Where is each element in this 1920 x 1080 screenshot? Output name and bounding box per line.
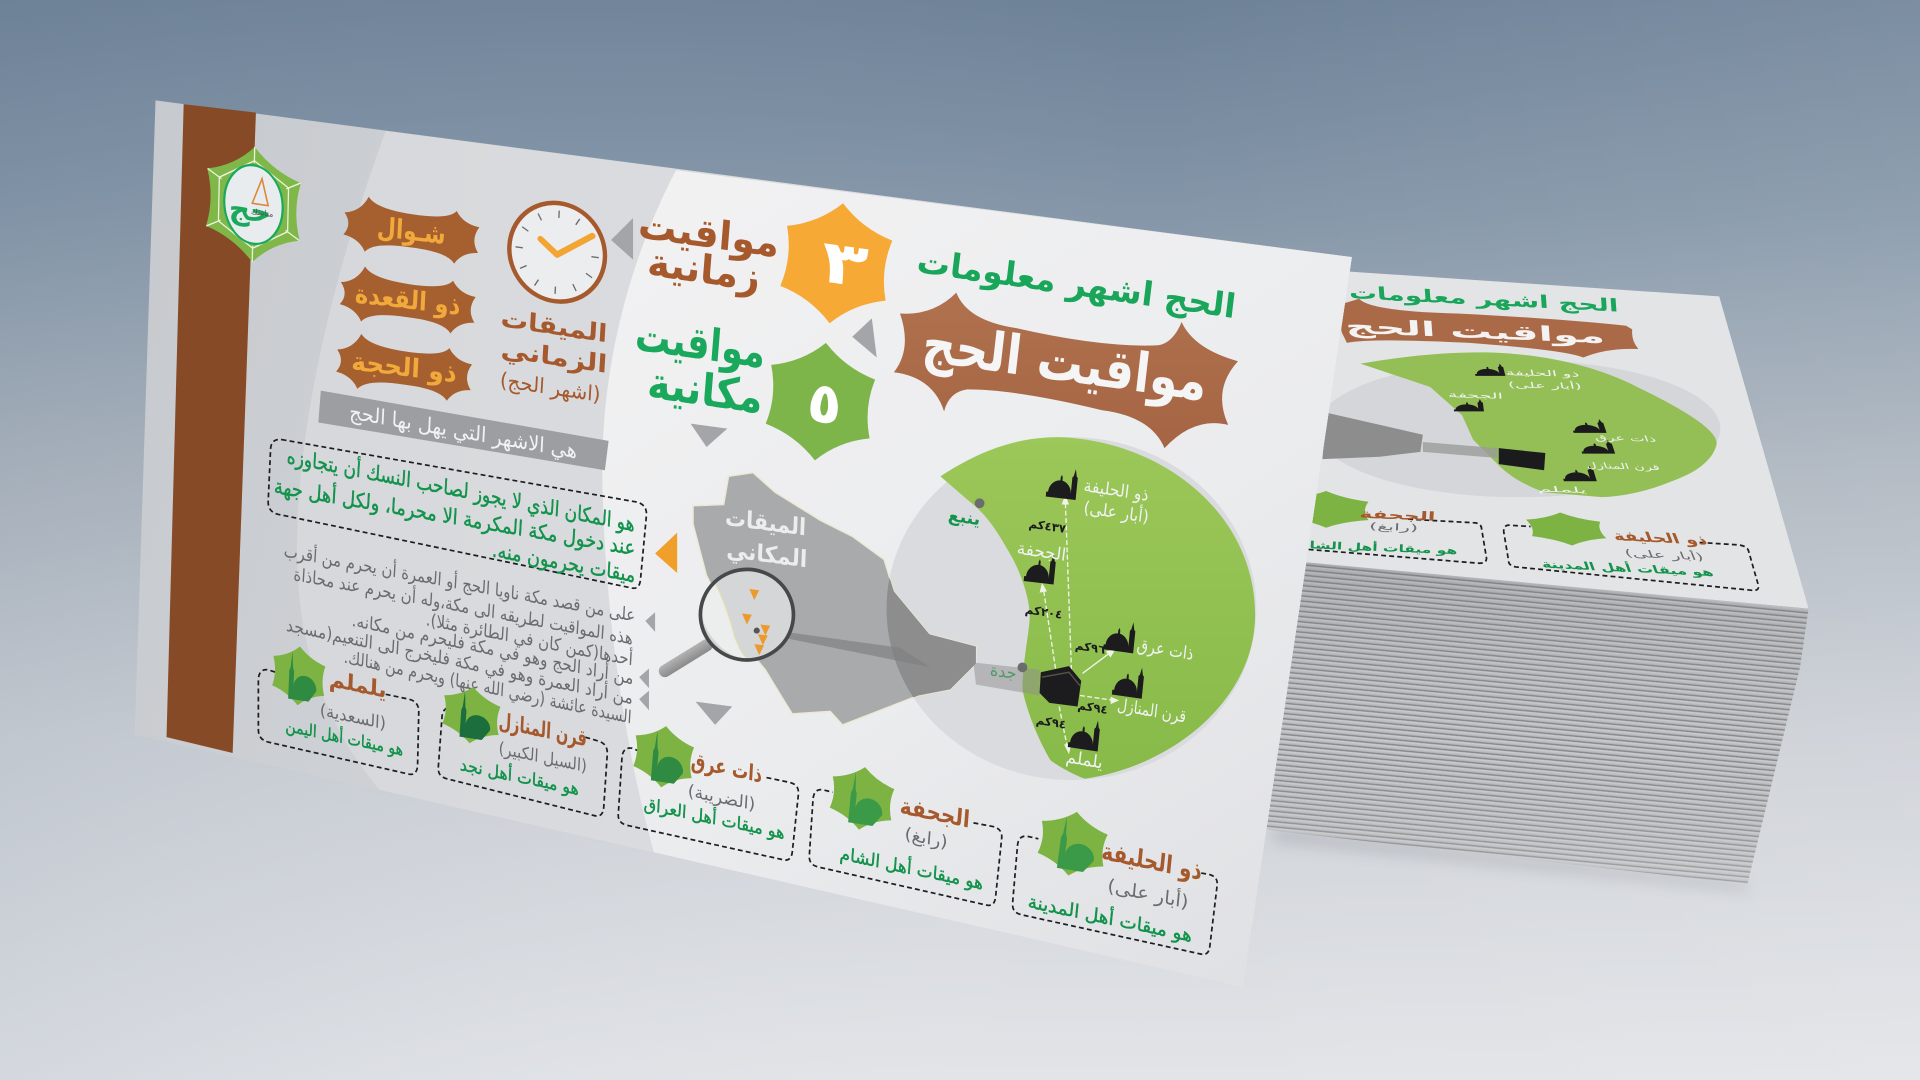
card base xyxy=(135,100,1352,987)
logo xyxy=(205,140,302,269)
back card: juhfa box: (رابغ) xyxy=(1369,521,1418,534)
miqat card: al-juhfa xyxy=(809,761,1002,905)
miqat card: yalamlam xyxy=(258,641,419,774)
label: five place miqats: مواقيت xyxy=(633,310,767,379)
miqat card: qarn al-manazil xyxy=(438,681,607,816)
month banner: dhu al-hijjah xyxy=(335,331,473,404)
city labels and dots xyxy=(947,498,1027,683)
subtitle: الحج اشهر معلومات xyxy=(915,241,1238,327)
map disc xyxy=(887,437,1256,780)
map place labels: ذات عرق xyxy=(1136,635,1194,665)
paragraph text: على من قصد مكة ناويا الحج أو العمرة أن يحرم من أقرب xyxy=(283,539,636,626)
label: three time miqats xyxy=(637,202,781,301)
label: place miqat xyxy=(725,503,808,573)
miqat card: yalamlam: هو ميقات أهل اليمن xyxy=(285,714,404,760)
distance labels: ٩٤كم xyxy=(1035,713,1067,732)
back card: map labels: الجحفة xyxy=(1447,390,1503,401)
month banner: shawwal: شـوال xyxy=(376,212,446,251)
city labels and dots: جدة xyxy=(989,660,1018,683)
logo: حج xyxy=(228,191,272,230)
back card: top surface xyxy=(1306,272,1808,609)
label: time miqat: الميقات xyxy=(500,303,608,348)
logo: مناسك xyxy=(251,207,273,219)
label: time miqat xyxy=(499,303,608,407)
back card: juhfa box xyxy=(1308,491,1488,564)
miqat card: yalamlam: يلملم xyxy=(329,666,387,704)
label: place miqat: الميقات xyxy=(725,503,807,541)
card shading zone: mid arc xyxy=(297,131,1352,987)
paragraph text: أحدها(كمن كان في الطائرة مثلا). xyxy=(425,607,634,670)
back card: map labels: قرن المنازل xyxy=(1584,461,1661,473)
saudi map xyxy=(693,473,976,725)
miqat card: dhat irq: هو ميقات أهل العراق xyxy=(643,792,785,844)
back card: map labels: ذو الحليفة xyxy=(1504,368,1580,379)
map place labels: يلملم xyxy=(1065,747,1104,774)
back card: subtitle: الحج اشهر معلومات xyxy=(1348,283,1619,316)
gray caption bar: هي الاشهر التي يهل بها الحج xyxy=(349,400,578,463)
miqat card: qarn al-manazil: هو ميقات أهل نجد xyxy=(460,753,579,800)
back card: dhu al-hulayfa box: (أبار على) xyxy=(1622,546,1706,563)
star icon xyxy=(441,681,501,749)
back card: dhu al-hulayfa box: ذو الحليفة xyxy=(1610,527,1710,548)
label: time miqat: (اشهر الحج) xyxy=(499,368,601,407)
back card: title banner: مواقيت الحج xyxy=(1344,314,1606,348)
miqat card: al-juhfa: الجحفة xyxy=(899,791,971,834)
dashed definition box: ميقات يحرمون منه. xyxy=(491,538,636,587)
star icon xyxy=(828,761,896,836)
back card: title banner xyxy=(1335,299,1638,358)
card shading zone: light area xyxy=(602,170,1352,987)
jeddah connector band xyxy=(973,662,1040,696)
title banner xyxy=(894,293,1238,448)
month banner: dhu al-qadah: ذو القعدة xyxy=(354,279,461,322)
month banner: dhu al-hijjah: ذو الحجة xyxy=(351,347,457,389)
magnifier icon xyxy=(665,569,793,671)
back card: juhfa box: الجحفة xyxy=(1359,507,1436,524)
front card xyxy=(135,100,1352,987)
miqat card: dhat irq xyxy=(618,720,799,860)
label: three time miqats: زمانية xyxy=(646,239,762,301)
map place labels: (أبار على) xyxy=(1082,496,1150,528)
distance labels: ٤٣٧كم xyxy=(1028,517,1067,536)
dashed definition box xyxy=(268,439,647,588)
paragraph text xyxy=(283,539,636,729)
map place labels: ذو الحليفة xyxy=(1082,476,1150,506)
miqat card: yalamlam: (السعدية) xyxy=(319,701,386,734)
label: five place miqats xyxy=(633,310,767,424)
paragraph text: من أراد العمرة وهو في مكة فليخرج الى التنعيم(مسجد xyxy=(286,613,634,709)
miqat card: dhu al-hulayfa: ذو الحليفة xyxy=(1100,836,1203,887)
miqat card: al-juhfa: هو ميقات أهل الشام xyxy=(839,841,984,894)
green region of map xyxy=(940,437,1255,779)
miqat card: qarn al-manazil: (السيل الكبير) xyxy=(498,739,587,777)
star icon xyxy=(632,720,695,793)
floor shadow under stack xyxy=(1273,830,1747,890)
back card: map labels: (أبار على) xyxy=(1507,379,1583,391)
back card: dhu al-hulayfa box: هو ميقات أهل المدينة xyxy=(1539,557,1715,579)
orange star with number xyxy=(777,196,896,331)
back card: dhu al-hulayfa box xyxy=(1504,511,1759,590)
back card: map labels: ذات عرق xyxy=(1593,433,1658,444)
star icon xyxy=(272,641,326,711)
map place labels: قرن المنازل xyxy=(1116,695,1187,727)
label: time miqat: الزماني xyxy=(500,334,608,379)
orange pointer triangle xyxy=(655,533,677,573)
back card: saudi map remnant xyxy=(1322,413,1423,459)
clock icon xyxy=(507,197,607,307)
dashed definition box: عند دخول مكة المكرمة الا محرما، ولكل أهل جهة xyxy=(273,472,636,560)
month banner: shawwal xyxy=(343,194,480,266)
miqat card: dhu al-hulayfa: (أبار على) xyxy=(1106,873,1190,913)
paragraph text: السيدة عائشة (رضي الله عنها) ويحرم من هنالك. xyxy=(343,647,632,729)
back card: map disc xyxy=(1316,360,1720,497)
distance labels: ٢٠٤كم xyxy=(1024,602,1063,622)
distance labels xyxy=(1024,517,1108,732)
label: place miqat: المكاني xyxy=(726,535,808,573)
kaaba icon xyxy=(1040,666,1081,707)
miqat card: al-juhfa: (رابغ) xyxy=(904,824,948,853)
card stack side xyxy=(1212,551,1809,884)
mosque icons xyxy=(1024,466,1145,751)
distance labels: ٩٦كم xyxy=(1074,638,1106,657)
orange star with number: ٣ xyxy=(818,226,871,302)
miqat card: dhu al-hulayfa xyxy=(1013,805,1217,954)
back card: jeddah band xyxy=(1423,442,1498,458)
title banner: مواقيت الحج xyxy=(919,311,1211,414)
miqat card: dhu al-hulayfa: هو ميقات أهل المدينة xyxy=(1027,889,1193,947)
miqat card: dhat irq: ذات عرق xyxy=(690,748,763,788)
miqat card: qarn al-manazil: قرن المنازل xyxy=(498,708,588,752)
back card: green region xyxy=(1360,352,1717,497)
miqat card: dhat irq: (الضريبة) xyxy=(687,781,756,815)
back card: map labels xyxy=(1447,368,1661,496)
distance labels: ٩٤كم xyxy=(1077,698,1108,717)
paragraph text: من أراد الحج وهو في مكة فليحرم من مكانه. xyxy=(351,608,634,689)
green star with number xyxy=(763,335,878,468)
city labels and dots: ينبع xyxy=(947,506,981,530)
back card: mosque icons xyxy=(1453,364,1615,481)
month banner: dhu al-qadah xyxy=(339,264,477,336)
back card: map labels: يلملم xyxy=(1536,484,1588,496)
route arrows xyxy=(1040,495,1119,754)
back card: juhfa box: هو ميقات أهل الشام xyxy=(1298,538,1458,557)
back card: kaaba xyxy=(1499,448,1545,470)
dashed definition box: هو المكان الذي لا يجوز لصاحب النسك أن يتجاوزه xyxy=(286,442,636,536)
green star with number: ٥ xyxy=(804,368,845,439)
label: five place miqats: مكانية xyxy=(646,358,765,424)
map place labels: الجحفة xyxy=(1016,539,1067,566)
map place labels xyxy=(1016,476,1194,774)
star icon xyxy=(1035,805,1110,882)
paragraph text: هذه المواقيت لطريقه الى مكة،وله أن يحرم عند محاذاة xyxy=(293,562,634,649)
label: three time miqats: مواقيت xyxy=(637,202,781,267)
brown side strip xyxy=(167,104,256,753)
pointer triangles xyxy=(611,218,877,725)
